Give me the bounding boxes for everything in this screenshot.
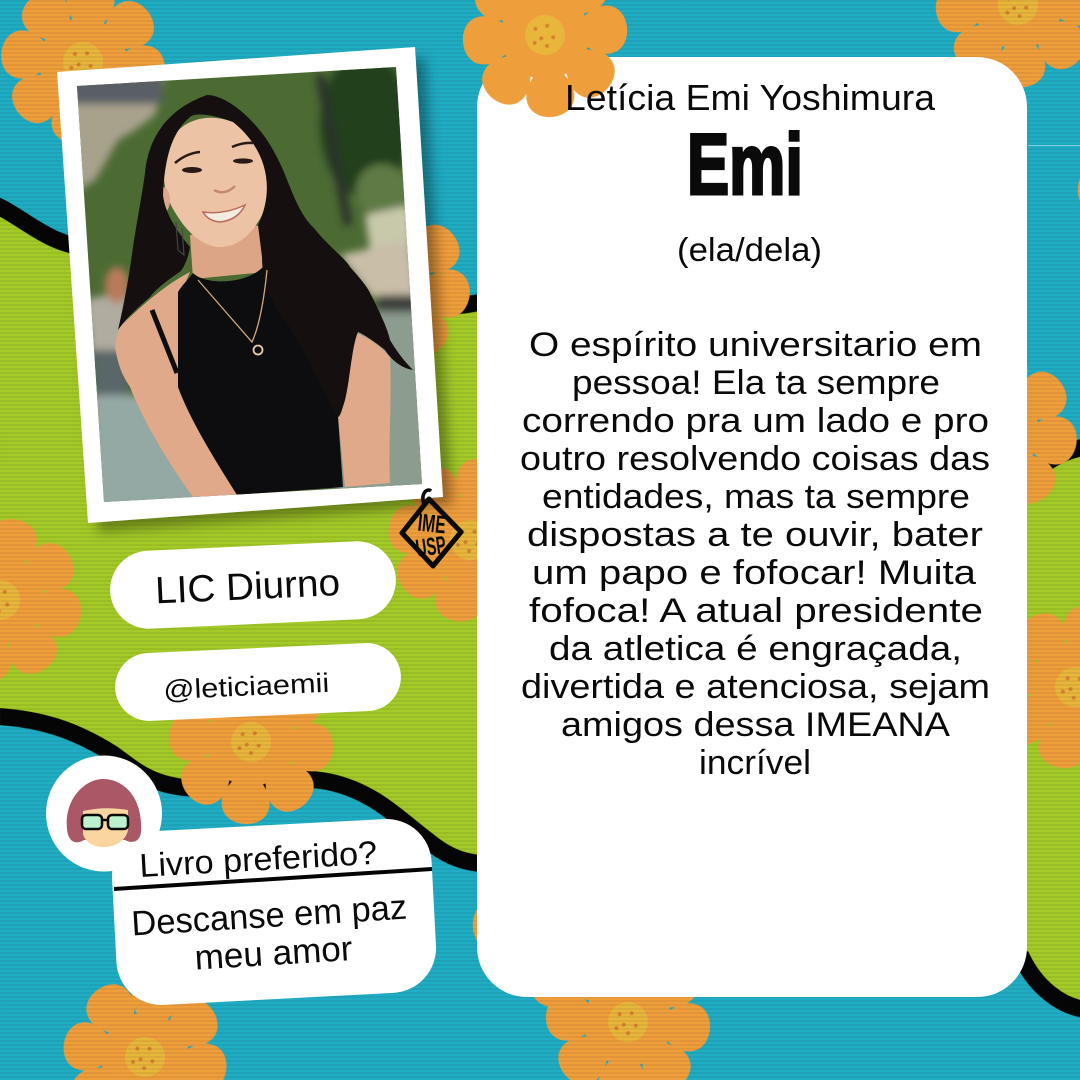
top (178, 267, 343, 495)
pill: instagram handle (114, 642, 402, 722)
arms (115, 272, 237, 497)
description: pessoa! Ela ta sempre (572, 364, 940, 402)
face (164, 118, 269, 247)
nickname: Emi (687, 117, 803, 213)
photo frame with portrait (57, 47, 452, 532)
flower overlapping the card (0, 0, 1080, 130)
description (520, 326, 990, 782)
card text (520, 77, 990, 782)
pill: course (108, 540, 398, 630)
hair (118, 95, 413, 417)
answer: Descanse em paz (130, 888, 408, 943)
pill: instagram handle: @leticiaemii (163, 668, 330, 705)
question: Livro preferido? (138, 834, 378, 884)
description: entidades, mas ta sempre (542, 478, 970, 516)
pronouns: (ela/dela) (677, 231, 822, 268)
description: um papo e fofocar! Muita (532, 554, 976, 592)
pill: course: LIC Diurno (154, 562, 341, 612)
panel: biography card (477, 57, 1027, 997)
answer: meu amor (193, 929, 354, 978)
answer (130, 888, 410, 981)
description: amigos dessa IMEANA (561, 706, 950, 744)
full name: Letícia Emi Yoshimura (565, 77, 936, 118)
description: outro resolvendo coisas das (520, 440, 990, 478)
description: incrível (699, 744, 811, 782)
description: correndo pra um lado e pro (522, 402, 989, 440)
description: O espírito universitario em (529, 326, 982, 364)
description: da atletica é engraçada, (549, 630, 962, 668)
card: favourite book (46, 756, 438, 1007)
description: fofoca! A atual presidente (529, 592, 983, 630)
avatar (46, 756, 162, 872)
thin light line at right (1028, 145, 1080, 146)
description: dispostas a te ouvir, bater (527, 516, 983, 554)
IME USP logo (402, 490, 461, 566)
IME USP logo: IME (416, 509, 447, 539)
IME USP logo: USP (414, 531, 448, 563)
description: divertida e atenciosa, sejam (521, 668, 990, 706)
